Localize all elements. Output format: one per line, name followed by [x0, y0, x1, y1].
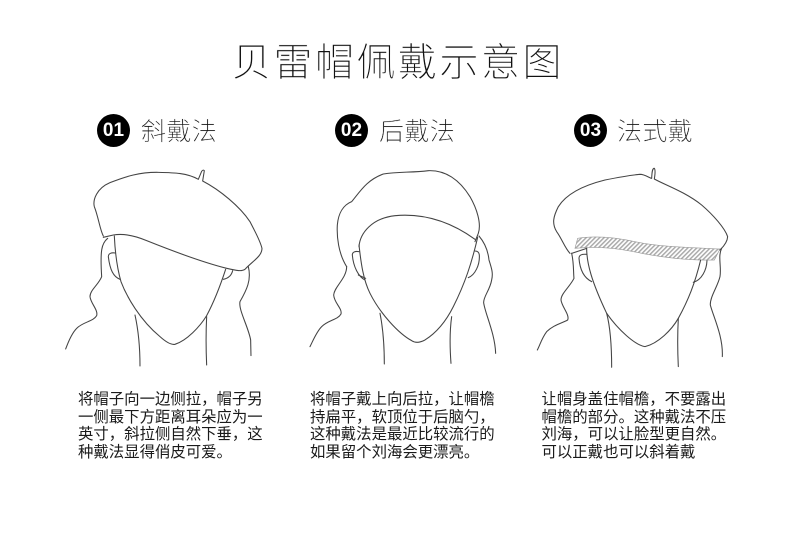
heading: 法式戴: 法式戴 — [617, 118, 693, 146]
text block: back style: 持扁平，软顶位于后脑勺， — [310, 409, 495, 426]
text block: French style: 让帽身盖住帽檐，不要露出 — [542, 391, 726, 408]
neck — [607, 313, 678, 367]
illustration: slanted beret — [66, 170, 262, 366]
face — [114, 236, 226, 344]
text block: French style — [542, 390, 726, 461]
heading: 斜戴法: 斜戴法 — [141, 118, 217, 146]
text block: French style: 刘海，可以让脸型更自然。 — [542, 426, 726, 443]
hair — [537, 248, 722, 357]
text block: slanted style: 英寸，斜拉侧自然下垂，这 — [78, 426, 263, 443]
heading: 后戴法: 后戴法 — [379, 118, 455, 146]
brim — [359, 215, 475, 247]
text block: slanted style — [78, 390, 263, 461]
hair — [66, 238, 251, 356]
text block: back style: 如果留个刘海会更漂亮。 — [310, 444, 479, 461]
hair — [310, 236, 496, 353]
hat outline — [94, 170, 262, 271]
text block: back style — [310, 390, 495, 461]
number badge 02: 02 — [341, 120, 362, 141]
hat outline — [337, 171, 479, 267]
title: 贝雷帽佩戴示意图 — [232, 42, 564, 85]
ears — [108, 253, 233, 279]
number badge 03 — [574, 114, 607, 147]
face — [587, 248, 701, 347]
illustration: back-tilted beret — [310, 171, 496, 364]
number badge 03: 03 — [580, 120, 601, 141]
face — [359, 237, 478, 342]
ears — [572, 248, 707, 282]
number badge 02 — [335, 114, 368, 147]
text block: back style: 将帽子戴上向后拉，让帽檐 — [310, 391, 495, 408]
text block: slanted style: 将帽子向一边侧拉，帽子另 — [78, 391, 263, 408]
neck — [380, 313, 452, 364]
hat outline — [554, 168, 728, 253]
ears — [352, 251, 479, 280]
hatched brim band — [575, 237, 720, 260]
text block: slanted style: 一侧最下方距离耳朵应为一 — [78, 409, 263, 426]
text block: slanted style: 种戴法显得俏皮可爱。 — [78, 444, 232, 461]
text block: French style: 帽檐的部分。这种戴法不压 — [542, 409, 726, 426]
text block: back style: 这种戴法是最近比较流行的 — [310, 426, 495, 443]
number badge 01 — [97, 114, 130, 147]
illustration: French style beret — [537, 168, 728, 367]
neck — [135, 315, 207, 366]
text block: French style: 可以正戴也可以斜着戴 — [542, 444, 695, 461]
number badge 01: 01 — [103, 120, 124, 141]
